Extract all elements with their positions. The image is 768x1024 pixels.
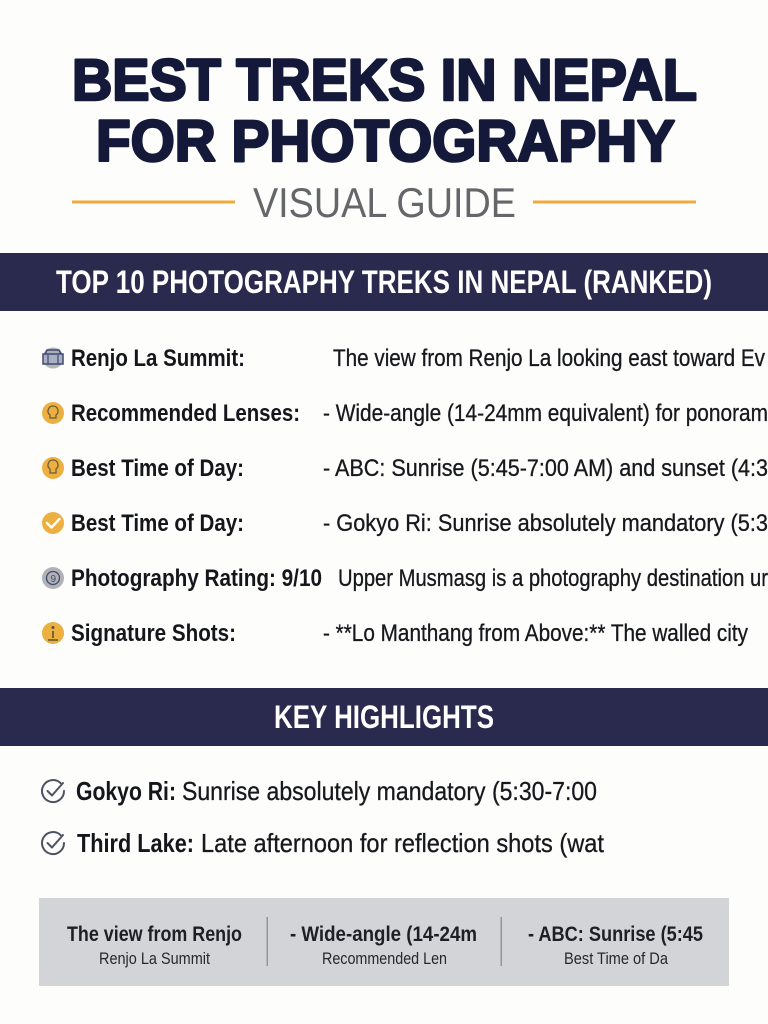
stat: Best Time of Day: - ABC: Sunrise (5:45 — [528, 923, 703, 946]
icon: check circle — [42, 780, 64, 802]
row: Best Time of Day (ABC) — [42, 455, 768, 482]
highlight: Third Lake: Late afternoon for reflection shots (wat — [201, 828, 605, 858]
row: Renjo La Summit: Renjo La Summit: — [71, 345, 245, 372]
row: Photography Rating — [42, 565, 768, 592]
section heading: key highlights: KEY HIGHLIGHTS — [274, 699, 494, 735]
row: Recommended Lenses — [42, 400, 768, 427]
title: FOR PHOTOGRAPHY — [96, 109, 675, 174]
stat: Renjo La Summit: The view from Renjo — [67, 923, 242, 946]
section heading: key highlights — [0, 688, 768, 746]
icon: light bulb — [42, 402, 64, 424]
row: Signature Shots: Signature Shots: — [71, 620, 236, 647]
highlight: Third Lake: Third Lake: — [77, 828, 194, 858]
row: Best Time of Day (Gokyo Ri) — [42, 510, 768, 537]
highlight: Gokyo Ri: Sunrise absolutely mandatory (5:30-7:00 — [182, 776, 597, 806]
highlight: Gokyo Ri: Gokyo Ri: — [76, 776, 176, 806]
icon: rating badge — [42, 567, 64, 589]
row: Signature Shots — [42, 620, 748, 647]
stat: Best Time of Day: Best Time of Da — [564, 949, 668, 968]
title — [72, 48, 697, 174]
panel: highlights list — [42, 776, 605, 858]
icon: info badge — [42, 622, 64, 644]
row: Photography Rating: Photography Rating: 9/10 — [71, 565, 322, 592]
stat: Recommended Lenses: Recommended Len — [322, 949, 447, 968]
title: BEST TREKS IN NEPAL — [72, 48, 697, 113]
subtitle: visual guide — [72, 179, 696, 226]
stat: Renjo La Summit — [67, 923, 242, 968]
section heading: top 10 treks — [0, 253, 768, 311]
row: Best Time of Day (Gokyo Ri): Best Time of Day: — [71, 510, 244, 537]
highlight: Third Lake — [42, 828, 605, 858]
panel: trek list — [42, 345, 768, 647]
icon: check circle — [42, 832, 64, 854]
icon: check badge — [42, 512, 64, 534]
subtitle: visual guide: VISUAL GUIDE — [253, 179, 516, 226]
stat: Best Time of Day — [528, 923, 703, 968]
icon: light bulb — [42, 457, 64, 479]
highlight: Gokyo Ri — [42, 776, 597, 806]
row: Recommended Lenses: Recommended Lenses: — [71, 400, 300, 427]
row: Renjo La Summit — [42, 345, 765, 372]
icon: rating badge: 9 — [50, 574, 56, 585]
stat: Renjo La Summit: Renjo La Summit — [99, 949, 210, 968]
panel: summary stats — [39, 898, 729, 986]
row: Best Time of Day (ABC): Best Time of Day: — [71, 455, 244, 482]
stat: Recommended Lenses: - Wide-angle (14-24m — [290, 923, 477, 946]
stat: Recommended Lenses — [290, 923, 477, 968]
icon: camera — [42, 348, 64, 368]
